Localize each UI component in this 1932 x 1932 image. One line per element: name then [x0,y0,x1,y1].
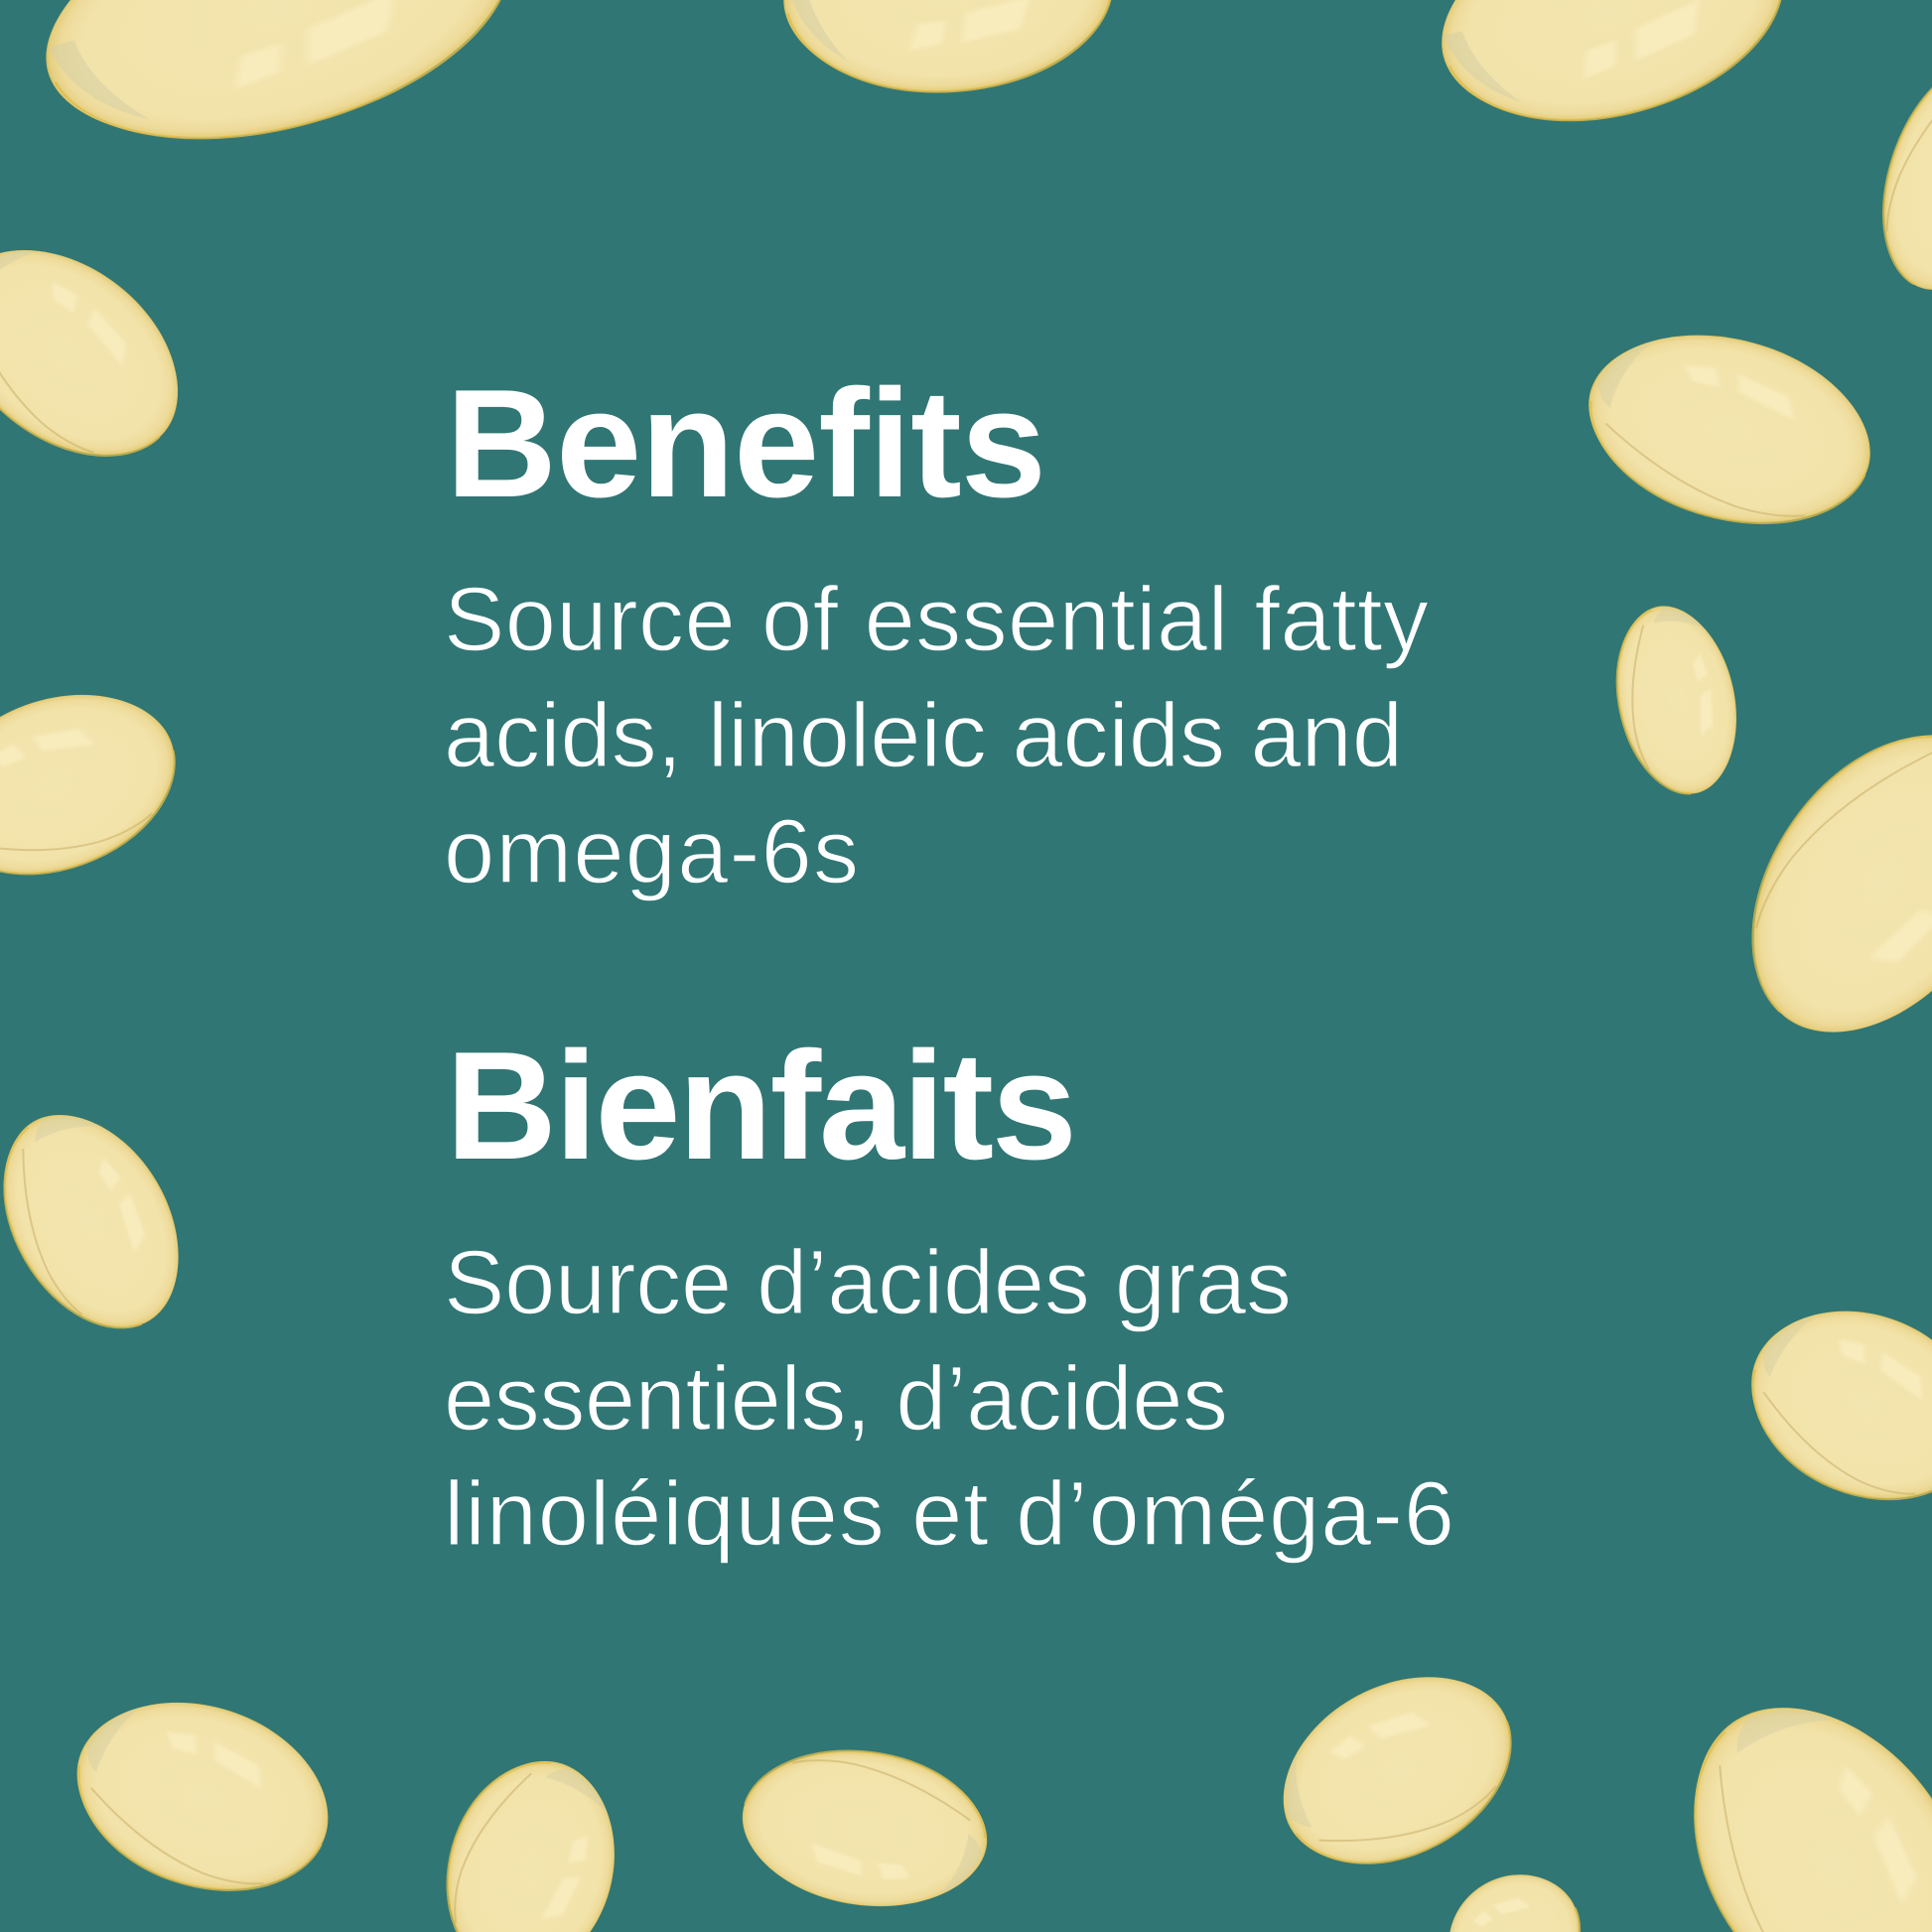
capsule: top right [1417,0,1808,156]
capsule: top left large [18,0,538,185]
capsule: top centre [776,0,1120,102]
capsule: bottom right large [1635,1654,1932,1932]
text block: benefits description: Source of essential fatty [444,569,1429,670]
capsule: bottom small [1426,1851,1602,1932]
capsule: right small [1600,595,1753,805]
heading: Bienfaits: Bienfaits [446,1020,1077,1191]
capsule: bottom centre right [1250,1639,1544,1901]
capsule: bottom left [53,1671,352,1921]
capsule: right edge large [1699,685,1932,1082]
capsule: left upper [0,207,218,498]
text block: bienfaits description [444,1232,1454,1565]
capsule: right edge top [1855,36,1932,312]
text block: bienfaits description: essentiels, d’acides [444,1348,1228,1449]
capsule: right edge lower [1723,1278,1932,1532]
capsule: bottom centre [732,1735,998,1922]
capsule: bottom centre left [424,1742,638,1932]
text block: bienfaits description: Source d’acides gras [444,1232,1292,1333]
text block: benefits description: omega-6s [444,801,859,902]
capsule: right upper [1568,306,1891,552]
text block: benefits description [444,569,1429,902]
capsule: left lower [0,1083,215,1359]
capsule: left middle [0,662,201,906]
text block: benefits description: acids, linoleic acids and [444,685,1403,786]
heading: Benefits: Benefits [446,357,1046,529]
text block: bienfaits description: linoléiques et d’oméga-6 [444,1463,1454,1565]
